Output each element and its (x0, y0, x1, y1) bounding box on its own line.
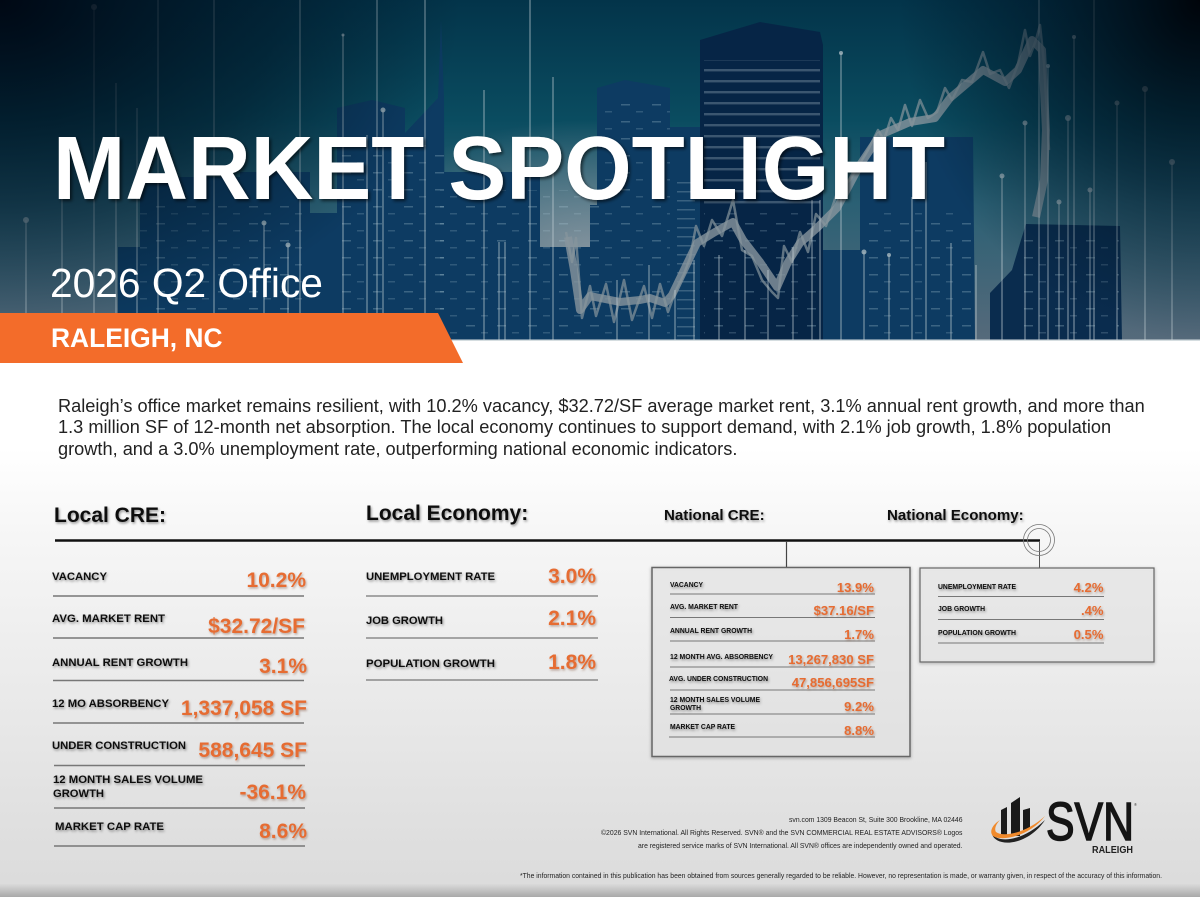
National CRE values: 9.2% (844, 699, 874, 714)
stock chart line (566, 25, 1049, 322)
Local CRE labels: UNDER CONSTRUCTION (52, 740, 186, 752)
heading: Local CRE: Local CRE: (54, 504, 166, 527)
National CRE values: 47,856,695SF (792, 675, 874, 690)
Local CRE values (181, 569, 307, 843)
National CRE values: 13.9% (837, 580, 874, 595)
National CRE labels (669, 582, 773, 731)
Local Economy values: 1.8% (548, 651, 596, 674)
National Economy values (1074, 580, 1104, 642)
Local Economy labels: POPULATION GROWTH (366, 658, 495, 670)
National CRE values: 1.7% (844, 627, 874, 642)
heading: Local Economy: Local Economy: (366, 502, 528, 525)
Local CRE labels: 12 MONTH SALES VOLUME (53, 774, 203, 786)
Local CRE labels (52, 571, 203, 833)
National Economy values: 4.2% (1074, 580, 1104, 595)
Local CRE labels: VACANCY (52, 571, 108, 583)
National CRE labels: VACANCY (670, 582, 703, 589)
footer legal text (601, 815, 963, 850)
subtitle: 2026 Q2 Office (50, 260, 323, 306)
panel: Local Economy (366, 502, 598, 680)
National Economy values: 0.5% (1074, 627, 1104, 642)
Local Economy labels: JOB GROWTH (366, 615, 443, 627)
Local Economy values: 2.1% (548, 607, 596, 630)
Local CRE labels: GROWTH (53, 788, 104, 800)
Local Economy labels: UNEMPLOYMENT RATE (366, 571, 495, 583)
National Economy labels (938, 584, 1016, 637)
Local CRE values: -36.1% (239, 781, 306, 804)
footer legal text: are registered service marks of SVN International. All SVN® offices are independently owned and operated. (638, 841, 962, 850)
logo: SVN Raleigh: ® (1134, 802, 1137, 807)
National CRE labels: MARKET CAP RATE (670, 724, 735, 731)
vertical data lines with dots (26, 0, 1172, 341)
panel: National CRE (652, 507, 910, 756)
Local Economy values: 3.0% (548, 565, 596, 588)
Local CRE labels: 12 MO ABSORBENCY (52, 698, 170, 710)
icon: orange swoosh (991, 816, 1045, 843)
market summary paragraph: Raleigh’s office market remains resilient, with 10.2% vacancy, $32.72/SF average market rent, 3.1% annual rent growth, and more than (58, 396, 1145, 416)
hero: city skyline banner (0, 0, 1200, 341)
location banner (0, 313, 463, 363)
Local CRE values: 3.1% (259, 655, 307, 678)
heading: National Economy: National Economy: (887, 507, 1024, 524)
National Economy labels: UNEMPLOYMENT RATE (938, 584, 1016, 591)
panel: National Economy (887, 507, 1154, 662)
National CRE labels: AVG. MARKET RENT (670, 604, 739, 611)
National CRE values: 8.8% (844, 723, 874, 738)
National Economy values: .4% (1081, 603, 1104, 618)
timeline connector (55, 524, 1054, 568)
Local CRE values: 588,645 SF (198, 739, 307, 762)
panel: Local CRE (52, 504, 307, 846)
disclaimer: *The information contained in this publication has been obtained from sources generally regarded to be reliable. However, no representation is made, or warranty given, in respect of the accuracy of this information. (520, 871, 1162, 880)
National Economy labels: POPULATION GROWTH (938, 630, 1016, 637)
National CRE labels: 12 MONTH SALES VOLUME (670, 697, 760, 704)
National CRE values (788, 580, 874, 738)
Local CRE values: 10.2% (246, 569, 306, 592)
footer legal text: ©2026 SVN International. All Rights Reserved. SVN® and the SVN COMMERCIAL REAL ESTATE ADVISORS® Logos (601, 828, 963, 837)
market summary paragraph: 1.3 million SF of 12-month net absorption. The local economy continues to support demand, with 2.1% job growth, 1.8% population (58, 417, 1111, 437)
logo: SVN Raleigh: RALEIGH (1092, 845, 1133, 856)
title: MARKET SPOTLIGHT (53, 119, 945, 219)
National CRE values: 13,267,830 SF (788, 652, 874, 667)
Local CRE labels: AVG. MARKET RENT (52, 613, 165, 625)
Local CRE values: $32.72/SF (208, 615, 305, 638)
logo: SVN Raleigh: SVN (1046, 792, 1134, 852)
icon: building bars (1001, 797, 1030, 836)
National CRE labels: ANNUAL RENT GROWTH (670, 628, 752, 635)
location banner: RALEIGH, NC (51, 323, 223, 353)
National Economy labels: JOB GROWTH (938, 606, 985, 613)
Local Economy labels (366, 571, 495, 670)
National CRE labels: 12 MONTH AVG. ABSORBENCY (670, 654, 773, 661)
National CRE labels: GROWTH (670, 705, 701, 712)
Local CRE values: 8.6% (259, 820, 307, 843)
National CRE labels: AVG. UNDER CONSTRUCTION (669, 676, 768, 683)
market summary paragraph: growth, and a 3.0% unemployment rate, outperforming national economic indicators. (58, 439, 737, 459)
National CRE values: $37.16/SF (814, 603, 874, 618)
Local CRE values: 1,337,058 SF (181, 697, 307, 720)
logo: SVN Raleigh (991, 792, 1137, 856)
Local Economy values (548, 565, 596, 674)
heading: National CRE: National CRE: (664, 507, 765, 524)
Local CRE labels: MARKET CAP RATE (55, 821, 164, 833)
footer legal text: svn.com 1309 Beacon St, Suite 300 Brookline, MA 02446 (789, 815, 962, 824)
Local CRE labels: ANNUAL RENT GROWTH (52, 657, 188, 669)
